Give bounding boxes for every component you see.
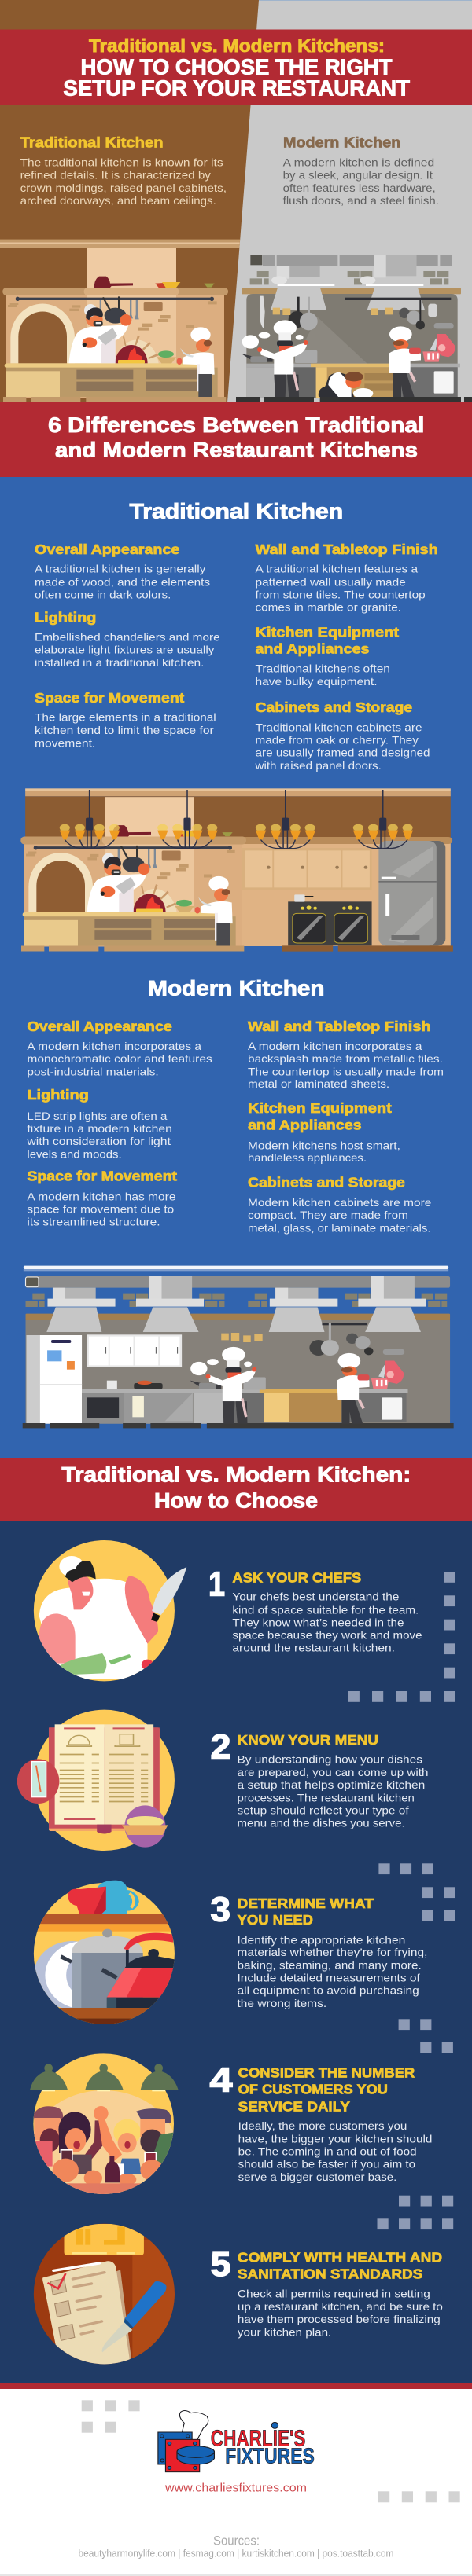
heading and text: They know what’s needed in the <box>232 1616 404 1628</box>
block: space for movement: its streamlined structure. <box>27 1216 160 1228</box>
icon: cookware <box>30 1881 181 2026</box>
heading and text: kind of space suitable for the team. <box>232 1603 419 1616</box>
icon: checklist and pen <box>34 2224 181 2368</box>
website url: www.charliesfixtures.com <box>164 2482 307 2495</box>
step 1: ask your chefs <box>34 1540 422 1681</box>
block: cabinets and storage: Modern kitchen cabinets are more <box>248 1196 432 1209</box>
block: kitchen equipment and appliances: and Appliances <box>248 1117 362 1132</box>
block: wall and tabletop finish <box>255 541 438 613</box>
block: kitchen equipment and appliances: and Appliances <box>255 641 370 657</box>
heading and text: OF CUSTOMERS YOU <box>238 2082 388 2097</box>
block: kitchen equipment and appliances: Kitchen Equipment <box>248 1100 392 1116</box>
number 3: 3 <box>211 1890 230 1928</box>
block: space for movement: Space for Movement <box>27 1169 177 1184</box>
step 3: determine what you need <box>30 1881 427 2026</box>
block: overall appearance: made of wood, and the elements <box>35 575 210 588</box>
block: wall and tabletop finish: comes in marble or granite. <box>255 600 401 613</box>
heading and text: By understanding how your dishes <box>238 1753 422 1766</box>
block: kitchen equipment and appliances: Modern kitchens host smart, <box>248 1139 400 1151</box>
blue section background <box>0 477 472 1458</box>
heading and text: Check all permits required in setting <box>238 2288 430 2300</box>
decorative squares: steps 1 to 2 <box>348 1572 455 1702</box>
block: lighting: installed in a traditional kitchen. <box>35 656 204 669</box>
logo: Charlie's Fixtures <box>158 2410 315 2472</box>
decorative squares: steps 3 to 4 <box>399 2019 453 2053</box>
block: lighting: Lighting <box>35 610 96 626</box>
block: space for movement: Space for Movement <box>35 690 184 706</box>
block: lighting: LED strip lights are often a <box>27 1110 168 1122</box>
block: wall and tabletop finish: from stone tiles. The countertop <box>255 589 426 601</box>
block: space for movement <box>35 690 216 750</box>
number 5: 5 <box>211 2245 231 2284</box>
block: space for movement: space for movement due to <box>27 1203 174 1216</box>
heading and text: SERVICE DAILY <box>238 2098 350 2114</box>
intro: modern kitchen <box>283 134 439 207</box>
number 4: 4 <box>209 2061 233 2100</box>
sources: Sources: <box>213 2534 260 2548</box>
block: overall appearance: post-industrial materials. <box>27 1065 159 1077</box>
chandeliers <box>65 790 407 849</box>
block: space for movement: kitchen tend to limit the space for <box>35 724 214 736</box>
heading and text: have, the bigger your kitchen should <box>238 2133 433 2145</box>
block: cabinets and storage: Cabinets and Storage <box>255 699 412 715</box>
block: overall appearance: often come in dark colors. <box>35 589 171 601</box>
heading and text: menu and the dishes you serve. <box>238 1817 405 1829</box>
heading and text: are prepared, you can come up with <box>238 1766 428 1778</box>
heading: Traditional Kitchen: Traditional Kitchen <box>129 499 343 523</box>
block: space for movement <box>27 1169 177 1228</box>
title lines: how to choose: SETUP FOR YOUR RESTAURANT <box>63 76 410 101</box>
navy section background <box>0 1521 472 2383</box>
block: lighting <box>35 610 220 669</box>
title lines: how to choose: HOW TO CHOOSE THE RIGHT <box>80 55 393 79</box>
title line: Traditional vs. Modern Kitchens: Traditional vs. Modern Kitchens: <box>89 35 385 56</box>
intro: modern kitchen: often features less hardware, <box>283 182 436 194</box>
block: overall appearance: monochromatic color and features <box>27 1052 212 1065</box>
block: lighting: levels and moods. <box>27 1147 122 1160</box>
block: lighting: with consideration for light <box>26 1135 171 1147</box>
heading band: 6 differences <box>0 402 472 477</box>
heading band: how to choose: Traditional vs. Modern Kitchen: <box>61 1463 411 1487</box>
intro: traditional kitchen: Traditional Kitchen <box>20 134 164 151</box>
block: lighting: Embellished chandeliers and more <box>35 631 220 644</box>
block: cabinets and storage <box>254 699 430 772</box>
block: kitchen equipment and appliances <box>255 625 399 688</box>
intro: traditional kitchen <box>20 134 227 207</box>
title banner <box>0 30 472 105</box>
block: kitchen equipment and appliances <box>248 1100 400 1164</box>
intro: modern kitchen: by a sleek, angular design. It <box>283 169 433 182</box>
block: cabinets and storage: made from oak or cherry. They <box>255 733 419 746</box>
heading and text <box>238 2250 443 2338</box>
block: cabinets and storage: Traditional kitchen cabinets are <box>255 721 422 733</box>
number 1: 1 <box>208 1565 225 1604</box>
scene: traditional kitchen header illustration <box>0 240 241 402</box>
block: overall appearance <box>27 1018 212 1077</box>
logo text: CHARLIE'S <box>211 2427 305 2452</box>
icon: cheering customers <box>30 2053 178 2194</box>
panel: traditional kitchen differences <box>35 499 438 772</box>
heading and text <box>238 1895 427 2009</box>
heading and text: processes. The restaurant kitchen <box>238 1791 415 1804</box>
intro: modern kitchen: flush doors, and a steel finish. <box>283 194 439 207</box>
heading band: how to choose <box>0 1458 472 1521</box>
block: space for movement: movement. <box>35 737 95 750</box>
heading and text: the wrong items. <box>238 1997 326 2009</box>
heading and text: a setup that helps optimize kitchen <box>238 1778 425 1791</box>
heading band: how to choose: How to Choose <box>154 1488 318 1512</box>
heading and text: SANITATION STANDARDS <box>238 2266 422 2282</box>
title lines: how to choose <box>63 55 410 101</box>
block: cabinets and storage: compact. They are made from <box>248 1209 408 1221</box>
heading and text: have them processed before finalizing <box>238 2313 441 2325</box>
heading and text: Include detailed measurements of <box>238 1972 420 1984</box>
heading and text: Identify the appropriate kitchen <box>238 1933 405 1946</box>
block: lighting: Lighting <box>27 1087 89 1103</box>
block: cabinets and storage: with raised panel doors. <box>254 759 382 772</box>
logo icon <box>158 2410 278 2472</box>
block: cabinets and storage: are usually framed and designed <box>255 747 430 759</box>
heading and text: ASK YOUR CHEFS <box>232 1569 361 1585</box>
block: cabinets and storage <box>248 1174 432 1234</box>
step 5: comply with health and sanitation <box>34 2224 443 2368</box>
block: overall appearance: A modern kitchen incorporates a <box>27 1040 201 1052</box>
panel: modern kitchen differences <box>26 977 444 1234</box>
heading and text: be. The coming in and out of food <box>238 2145 417 2157</box>
heading band: 6 differences: 6 Differences Between Traditional <box>48 413 424 437</box>
block: lighting <box>26 1087 172 1160</box>
heading and text: should also be faster if you aim to <box>238 2158 415 2171</box>
block: cabinets and storage: metal, glass, or laminate materials. <box>248 1221 431 1234</box>
block: wall and tabletop finish: patterned wall usually made <box>255 575 406 588</box>
heading and text: setup should reflect your type of <box>238 1804 409 1817</box>
logo text: FIXTURES <box>225 2444 315 2468</box>
number 2: 2 <box>211 1728 231 1767</box>
block: wall and tabletop finish: The countertop is usually made from <box>248 1065 444 1077</box>
block: kitchen equipment and appliances: Traditional kitchens often <box>255 662 390 674</box>
heading and text: baking, steaming, and many more. <box>238 1958 422 1971</box>
block: overall appearance: A traditional kitchen is generally <box>35 563 205 575</box>
intro: traditional kitchen: crown moldings, raised panel cabinets, <box>20 182 227 194</box>
heading and text: materials whether they’re for frying, <box>238 1946 427 1958</box>
heading and text <box>232 1569 422 1654</box>
block: kitchen equipment and appliances: Kitchen Equipment <box>255 625 399 640</box>
step 2: know your menu <box>17 1710 429 1851</box>
decorative squares: steps 2 to 3 <box>378 1863 455 1921</box>
heading and text: COMPLY WITH HEALTH AND <box>238 2250 442 2266</box>
heading and text: all equipment to avoid purchasing <box>238 1984 419 1997</box>
heading and text: Ideally, the more customers you <box>238 2119 407 2132</box>
block: space for movement: The large elements in a traditional <box>35 711 216 724</box>
block: overall appearance: Overall Appearance <box>35 541 180 557</box>
block: overall appearance <box>35 541 210 601</box>
intro: modern kitchen: A modern kitchen is defined <box>283 156 434 169</box>
heading band: 6 differences: and Modern Restaurant Kitchens <box>55 439 418 462</box>
icon: menu <box>17 1710 175 1851</box>
intro: modern kitchen: Modern Kitchen <box>283 134 400 151</box>
heading and text: KNOW YOUR MENU <box>238 1732 378 1748</box>
block: lighting: elaborate light fixtures are usually <box>35 643 214 655</box>
block: overall appearance: Overall Appearance <box>27 1018 172 1034</box>
step 4: consider the number of customers <box>30 2053 431 2194</box>
sources <box>79 2534 393 2559</box>
sources: beautyharmonylife.com | fesmag.com | kurtiskitchen.com | pos.toasttab.com <box>79 2548 393 2559</box>
block: wall and tabletop finish: Wall and Tabletop Finish <box>255 541 438 557</box>
heading and text: space because they work and move <box>232 1628 422 1641</box>
footer red strip <box>0 2383 472 2389</box>
heading and text: DETERMINE WHAT <box>238 1895 374 1911</box>
block: wall and tabletop finish: Wall and Tabletop Finish <box>248 1018 431 1034</box>
block: lighting: fixture in a modern kitchen <box>27 1122 172 1135</box>
block: wall and tabletop finish: backsplash made from metallic tiles. <box>248 1052 443 1065</box>
block: kitchen equipment and appliances: have bulky equipment. <box>255 675 378 688</box>
heading and text: CONSIDER THE NUMBER <box>238 2064 415 2080</box>
heading and text: around the restaurant kitchen. <box>232 1642 395 1654</box>
heading and text: YOU NEED <box>238 1912 313 1928</box>
intro: traditional kitchen: The traditional kitchen is known for its <box>20 156 223 169</box>
heading and text: serve a bigger customer base. <box>238 2171 396 2183</box>
heading and text: your kitchen plan. <box>238 2325 331 2338</box>
scene: modern kitchen header illustration <box>236 255 472 402</box>
block: wall and tabletop finish: A traditional kitchen features a <box>255 563 418 575</box>
illustration: modern kitchen with hoods <box>23 1266 454 1428</box>
heading and text: up a restaurant kitchen, and be sure to <box>238 2300 443 2313</box>
header background: traditional and modern split <box>0 0 472 402</box>
intro: traditional kitchen: arched doorways, and beam ceilings. <box>20 194 216 207</box>
illustration: traditional kitchen with chandeliers <box>20 788 453 952</box>
heading and text <box>238 2064 433 2183</box>
block: wall and tabletop finish: metal or laminated sheets. <box>248 1077 389 1090</box>
block: wall and tabletop finish <box>248 1018 444 1090</box>
block: kitchen equipment and appliances: handleless appliances. <box>248 1151 367 1164</box>
heading: Modern Kitchen: Modern Kitchen <box>148 977 324 1000</box>
decorative squares: steps 4 to 5 <box>378 2196 453 2229</box>
block: wall and tabletop finish: A modern kitchen incorporates a <box>248 1040 422 1052</box>
block: cabinets and storage: Cabinets and Storage <box>248 1174 405 1190</box>
block: space for movement: A modern kitchen has more <box>27 1190 176 1202</box>
decorative squares: footer <box>82 2400 460 2502</box>
logo text <box>211 2427 315 2468</box>
heading and text: Your chefs best understand the <box>232 1591 400 1603</box>
heading and text <box>238 1732 428 1829</box>
intro: traditional kitchen: refined details. It is characterized by <box>20 169 211 182</box>
icon: chef with knife <box>34 1540 186 1681</box>
